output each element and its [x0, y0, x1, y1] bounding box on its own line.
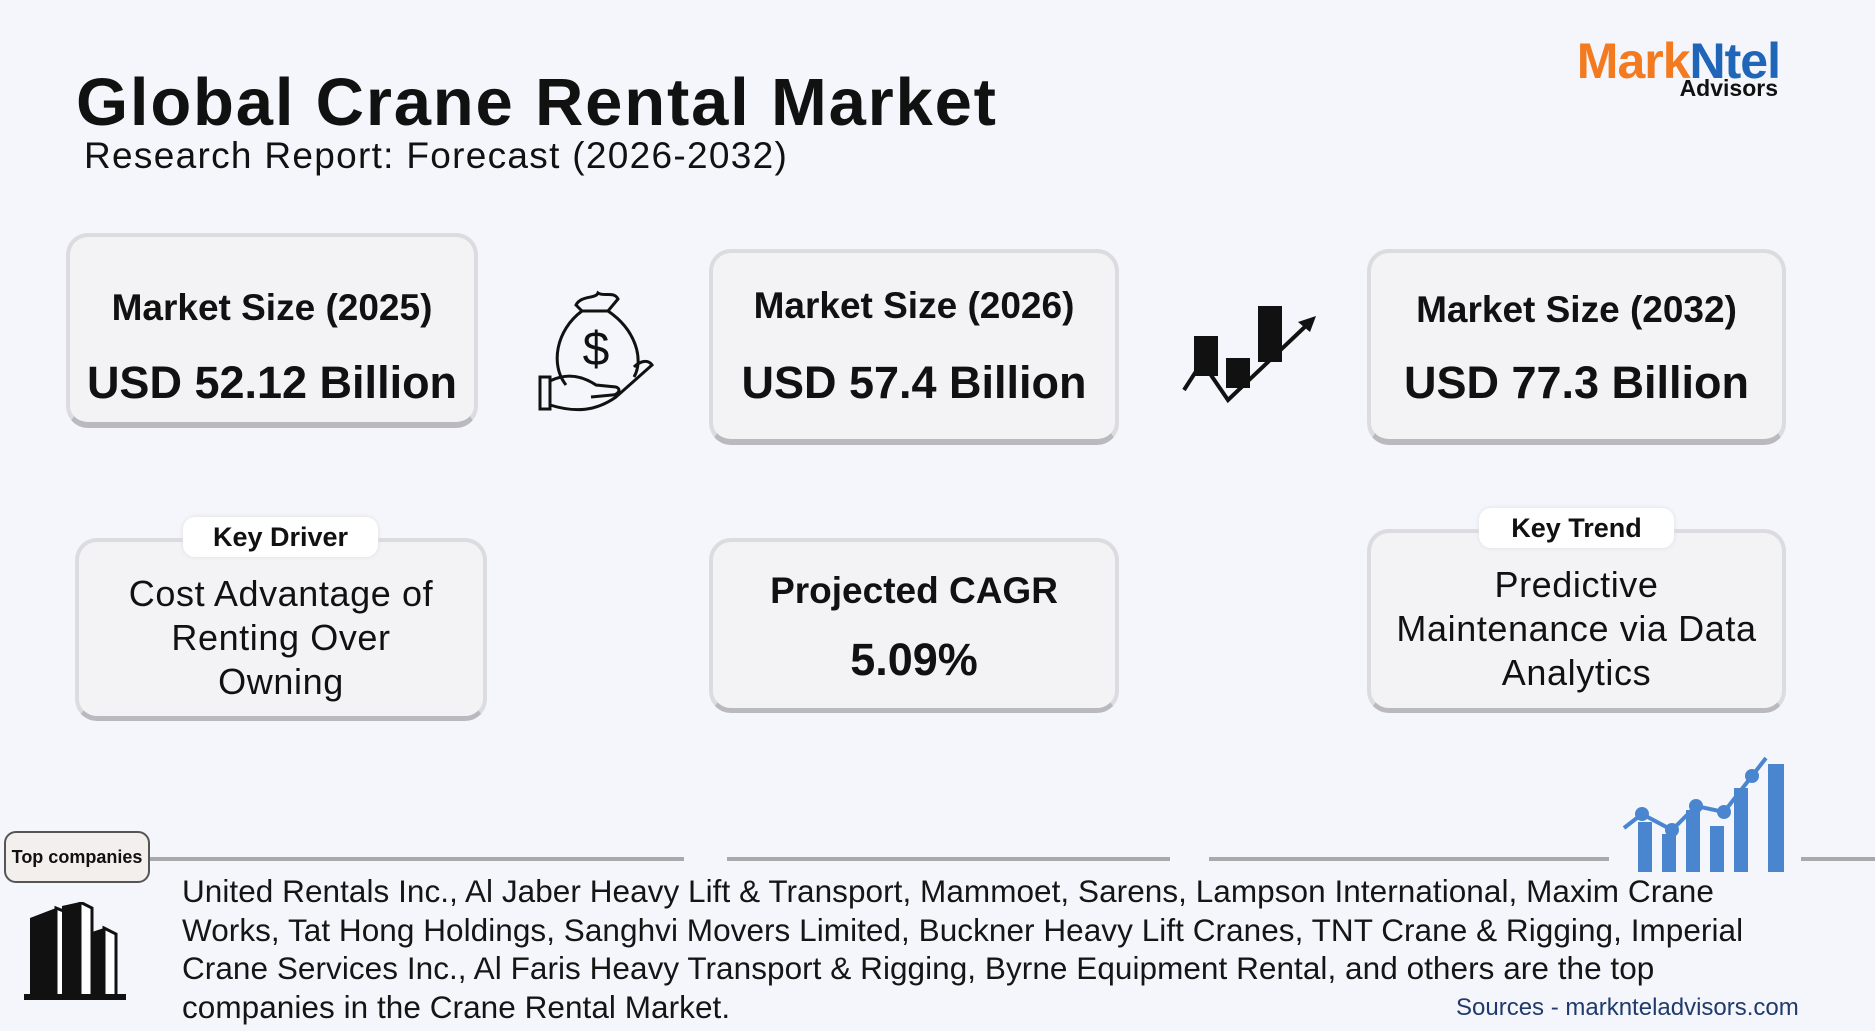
- text: company list: [182, 873, 1743, 1025]
- tag: key trend: Key Trend: [1511, 513, 1642, 543]
- panel: market size 2032: Market Size (2032): [1416, 289, 1737, 330]
- panel: key driver: Cost Advantage of: [129, 573, 433, 614]
- panel: key driver: [75, 538, 487, 721]
- tag: key trend: [1479, 508, 1674, 548]
- panel: market size 2026: USD 57.4 Billion: [741, 357, 1087, 408]
- text: company list: companies in the Crane Rental Market.: [182, 989, 730, 1025]
- icon: money bag in hand: $: [583, 323, 609, 376]
- panel: key driver: Renting Over: [171, 617, 391, 658]
- panel: key trend: Analytics: [1502, 652, 1651, 693]
- tag: top companies: Top companies: [12, 847, 142, 867]
- logo: MarkNtel: [1577, 33, 1780, 89]
- panel: key trend: [1367, 529, 1786, 713]
- panel: market size 2032: USD 77.3 Billion: [1404, 357, 1749, 408]
- tag: top companies: [4, 831, 150, 883]
- icon: growth arrow chart: [1182, 306, 1316, 404]
- text: company list: Crane Services Inc., Al Faris Heavy Transport & Rigging, Byrne Equipment Rental, and others are the top: [182, 950, 1654, 986]
- panel: market size 2025: Market Size (2025): [112, 287, 432, 328]
- panel: projected CAGR: Projected CAGR: [770, 570, 1058, 611]
- icon: bar chart growth: [1622, 756, 1784, 872]
- text: company list: Works, Tat Hong Holdings, Sanghvi Movers Limited, Buckner Heavy Lift Cranes, TNT Crane & Rigging, Imperial: [182, 912, 1743, 948]
- sources: Sources - marknteladvisors.com: [1456, 994, 1799, 1021]
- panel: projected CAGR: 5.09%: [850, 634, 978, 685]
- text: company list: United Rentals Inc., Al Jaber Heavy Lift & Transport, Mammoet, Sarens, Lampson International, Maxim Crane: [182, 873, 1714, 909]
- title: Global Crane Rental Market: [76, 65, 998, 140]
- panel: projected CAGR: [709, 538, 1119, 713]
- panel: key trend: Predictive: [1494, 564, 1659, 605]
- panel: key driver: Owning: [218, 661, 344, 702]
- subtitle: Research Report: Forecast (2026-2032): [84, 135, 788, 176]
- logo: Advisors: [1680, 75, 1778, 101]
- tag: key driver: [183, 517, 378, 557]
- divider lines: [150, 857, 684, 861]
- panel: market size 2032: [1367, 249, 1786, 445]
- panel: market size 2025: [66, 233, 478, 428]
- icon: buildings: [24, 902, 126, 1000]
- panel: market size 2026: Market Size (2026): [754, 285, 1074, 326]
- panel: market size 2025: USD 52.12 Billion: [87, 357, 457, 408]
- panel: market size 2026: [709, 249, 1119, 445]
- tag: key driver: Key Driver: [213, 522, 348, 552]
- icon: money bag in hand: [538, 290, 654, 412]
- panel: key trend: Maintenance via Data: [1396, 608, 1757, 649]
